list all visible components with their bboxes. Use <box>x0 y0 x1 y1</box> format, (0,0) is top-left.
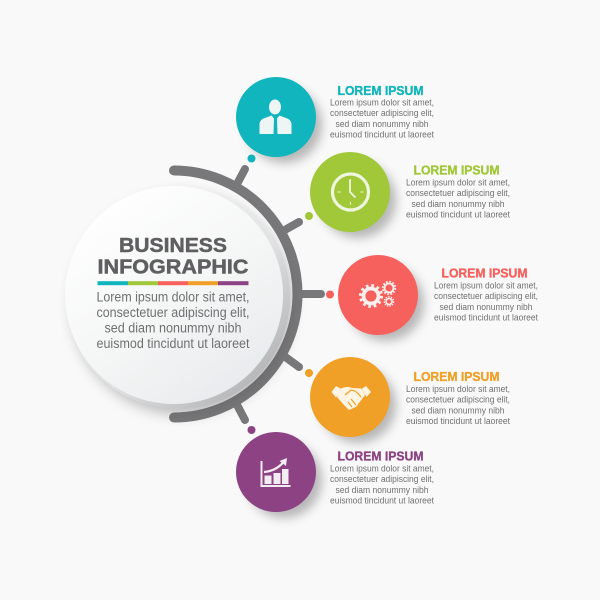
step 3 text: LOREM IPSUM <box>442 266 528 280</box>
central title: INFOGRAPHIC <box>98 256 249 278</box>
icon: clock <box>332 174 368 210</box>
step 3 text: sed diam nonummy nibh <box>440 302 532 312</box>
step 5 text: Lorem ipsum dolor sit amet, <box>330 464 434 474</box>
step 1 text <box>330 84 434 140</box>
step 4 text: euismod tincidunt ut laoreet <box>406 416 510 426</box>
step 1 text: sed diam nonummy nibh <box>336 119 428 129</box>
central description: Lorem ipsum dolor sit amet, <box>96 290 250 304</box>
central disc <box>65 185 292 414</box>
step 4 text: Lorem ipsum dolor sit amet, <box>406 384 510 394</box>
step 5 text: euismod tincidunt ut laoreet <box>330 496 434 506</box>
step 2 text <box>406 164 510 220</box>
step 5 text: consectetuer adipiscing elit, <box>330 474 434 484</box>
central hub arc with connector ticks <box>174 169 321 420</box>
central description: consectetuer adipiscing elit, <box>96 305 250 320</box>
central title: BUSINESS <box>119 234 227 257</box>
central description <box>96 290 250 351</box>
step 1 circle: teal <box>236 77 322 163</box>
icon: rising bar chart <box>260 458 290 487</box>
icon: gears <box>360 282 395 306</box>
step 4 text: sed diam nonummy nibh <box>412 406 504 416</box>
step 3 text: euismod tincidunt ut laoreet <box>434 313 538 323</box>
step 2 circle: green <box>310 152 396 238</box>
connector dots <box>248 154 334 434</box>
icon: businessman <box>260 100 292 134</box>
step 3 circle: coral <box>338 255 424 341</box>
step 5 text: sed diam nonummy nibh <box>336 485 428 495</box>
step 3 text: Lorem ipsum dolor sit amet, <box>434 280 538 290</box>
step 2 text: euismod tincidunt ut laoreet <box>406 210 510 220</box>
step 1 text: consectetuer adipiscing elit, <box>330 108 434 118</box>
step 3 text <box>434 266 538 323</box>
step 5 circle: purple <box>236 432 322 518</box>
step 5 text: LOREM IPSUM <box>338 450 424 464</box>
step 4 text: consectetuer adipiscing elit, <box>406 395 510 405</box>
step 4 text <box>406 370 510 426</box>
central description: sed diam nonummy nibh <box>104 320 242 336</box>
colour bar <box>98 281 248 285</box>
step 5 text <box>330 450 434 506</box>
step 4 text: LOREM IPSUM <box>414 370 500 384</box>
step 1 text: LOREM IPSUM <box>338 84 424 98</box>
step 2 text: Lorem ipsum dolor sit amet, <box>406 178 510 188</box>
step 2 text: consectetuer adipiscing elit, <box>406 188 510 198</box>
step 1 text: Lorem ipsum dolor sit amet, <box>330 98 434 108</box>
central title <box>98 234 249 278</box>
step 2 text: LOREM IPSUM <box>414 164 500 178</box>
step 2 text: sed diam nonummy nibh <box>412 199 504 209</box>
step 4 circle: orange <box>310 357 396 443</box>
step 1 text: euismod tincidunt ut laoreet <box>330 130 434 140</box>
central description: euismod tincidunt ut laoreet <box>96 336 250 351</box>
icon: handshake <box>332 386 371 410</box>
step 3 text: consectetuer adipiscing elit, <box>434 291 538 301</box>
